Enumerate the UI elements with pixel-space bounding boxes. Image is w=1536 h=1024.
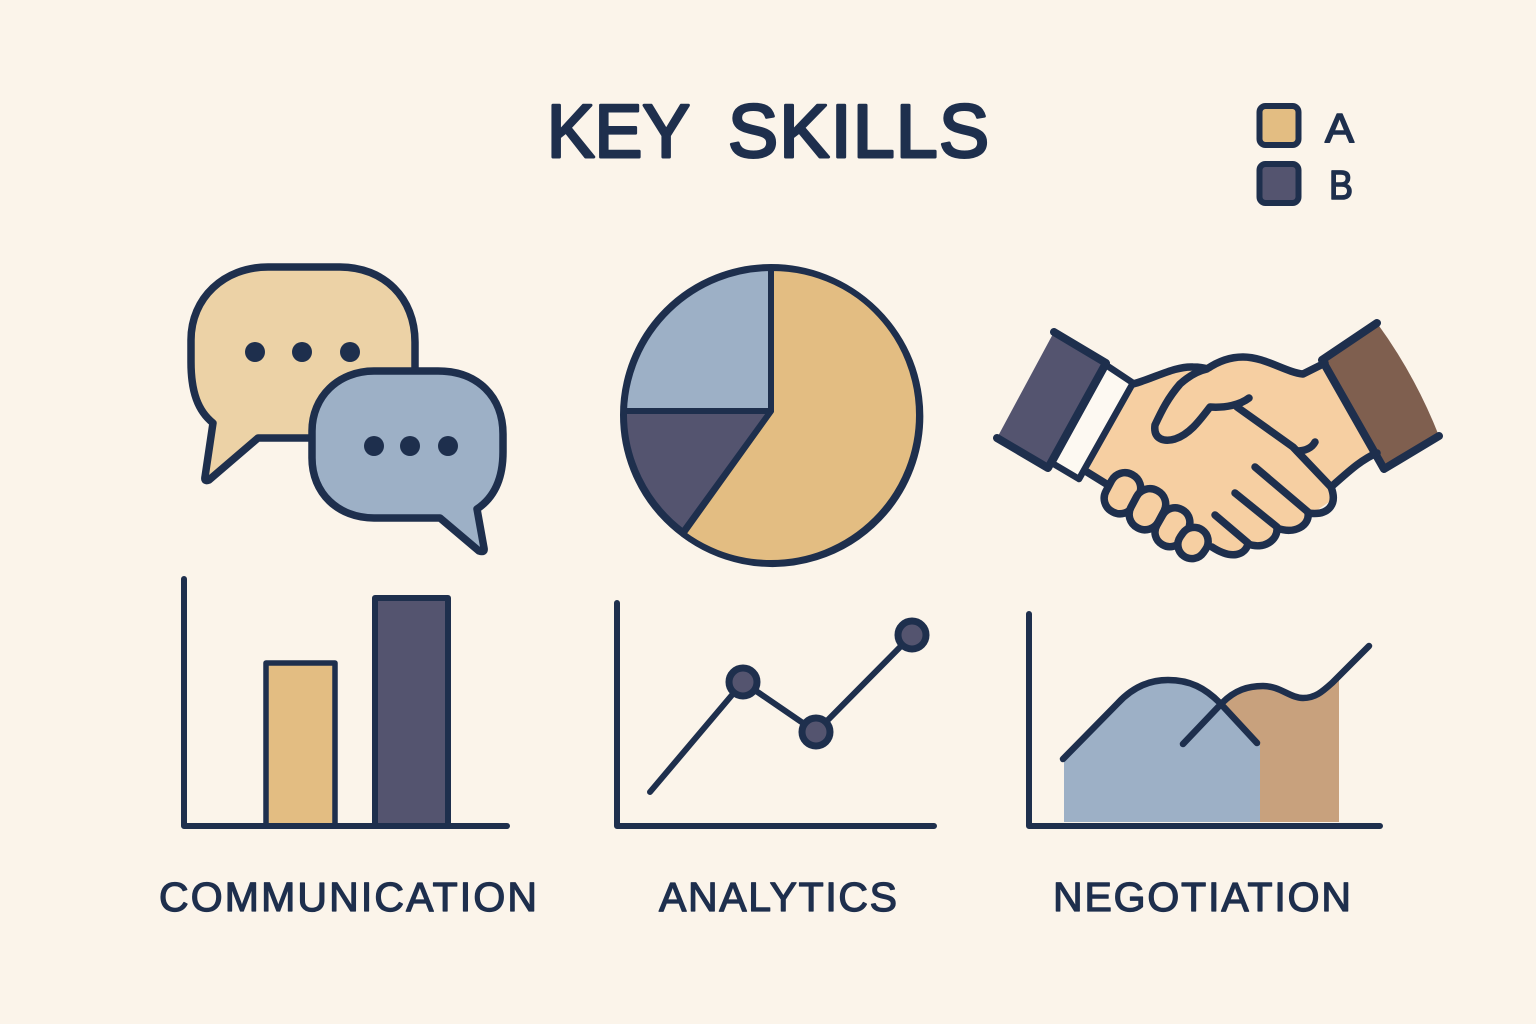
curve B [1183,646,1369,744]
legend swatch B [1260,164,1298,203]
trend line [650,635,912,792]
pie outline [623,267,919,563]
blue speech bubble [312,371,503,552]
data points [729,621,926,746]
thumb [1155,369,1249,440]
title: KEY [547,89,690,173]
finger line 3 [1215,515,1248,543]
label: negotiation: NEGOTIATION [1053,874,1351,920]
curve A [1063,680,1257,759]
tan speech bubble [191,267,415,481]
bar A [266,663,335,826]
legend [1260,105,1355,208]
tan bubble dots [245,342,360,362]
bar chart axes [184,579,507,826]
icon: handshake [997,323,1439,564]
bar B [375,598,448,826]
pie slice blue [624,268,771,411]
title: SKILLS [728,89,989,173]
brown area [1222,677,1339,822]
right brown sleeve [1322,323,1439,469]
finger line 1 [1255,467,1308,512]
pie slice dark [624,411,771,532]
legend label B: B [1329,162,1353,208]
area chart [1029,614,1380,826]
left navy sleeve [997,332,1106,468]
left hand outline [1087,367,1207,485]
hand fill [1087,357,1377,555]
palm and finger outline [1212,407,1333,555]
line chart axes [617,603,934,826]
pie chart [623,267,920,564]
blue bubble dots [364,436,458,456]
pie slice tan [683,268,920,564]
knuckles [1099,467,1214,564]
wrist crease [1297,442,1315,451]
legend swatch A [1260,106,1298,145]
title [547,89,989,173]
legend label A: A [1325,105,1355,151]
icon: speech bubbles [191,267,503,552]
right hand top outline [1207,357,1377,487]
label: analytics: ANALYTICS [659,874,897,920]
white shirt cuff [1052,365,1133,479]
area chart axes [1029,614,1380,826]
line chart [617,603,934,826]
finger line 2 [1235,493,1277,527]
blue area [1064,680,1260,822]
bar chart [184,579,507,826]
label: communication: COMMUNICATION [159,874,537,920]
